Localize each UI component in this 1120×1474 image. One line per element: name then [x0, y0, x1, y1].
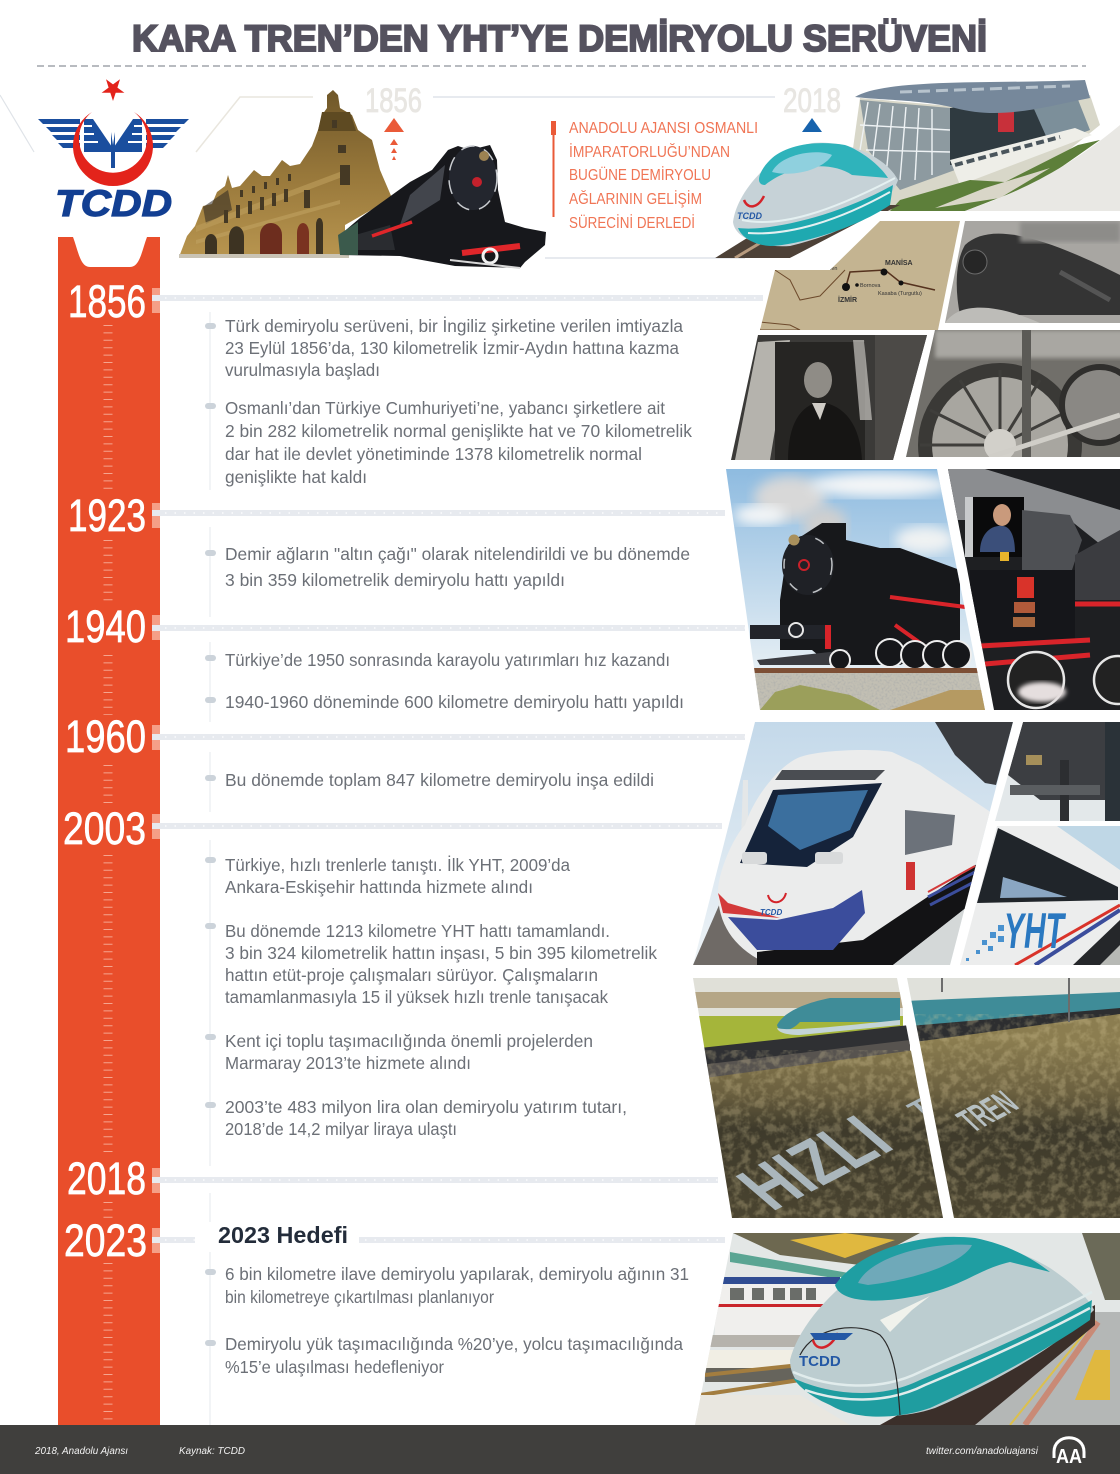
text block: 1923 [225, 544, 690, 590]
photo: İzmir map: MANİSA [885, 259, 913, 267]
footer source: Kaynak: TCDD [179, 1446, 245, 1457]
photo: YHT train front: TCDD [760, 908, 782, 917]
year labels: 2018 [67, 1153, 146, 1204]
photo: archive locomotive [945, 221, 1120, 323]
icon: AA logo: AA [1056, 1446, 1082, 1468]
intro text: İMPARATORLUĞU’NDAN [569, 142, 730, 161]
text block: 1856: Türk demiryolu serüveni, bir İngiliz şirketine verilen imtiyazla [225, 316, 683, 336]
year labels: 1923 [68, 490, 146, 541]
photo: steam locomotive [726, 469, 990, 711]
intro text [551, 120, 758, 232]
text block: 2003: tamamlanmasıyla 15 il yüksek hızlı trenle tanışacak [225, 987, 608, 1007]
icon: crescent [73, 112, 153, 186]
text block: 2003: 3 bin 324 kilometrelik hattın inşası, 5 bin 395 kilometrelik [225, 943, 657, 963]
text block: 2003: Türkiye, hızlı trenlerle tanıştı. İlk YHT, 2009’da [225, 855, 570, 875]
text block: 1923: Demir ağların "altın çağı" olarak nitelendirildi ve bu dönemde [225, 544, 690, 564]
text block: 1856: 23 Eylül 1856’da, 130 kilometrelik İzmir-Aydın hattına kazma [225, 338, 679, 358]
photo: YHT carriage: YHT [1004, 903, 1067, 959]
intro text: SÜRECİNİ DERLEDİ [569, 213, 695, 232]
photo: steam locomotive hero [338, 145, 546, 268]
hero year 2018: 2018 [783, 82, 841, 120]
photo: modern station and high-speed train hero: TCDD [737, 211, 762, 221]
footer credit: 2018, Anadolu Ajansı [34, 1446, 128, 1457]
photo: high-speed train, TREN sign [905, 978, 1120, 1218]
year tabs [152, 288, 160, 1253]
year labels: 1960 [65, 711, 146, 762]
heading: 2023 Hedefi: 2023 Hedefi [218, 1222, 348, 1248]
bullets [205, 323, 216, 1346]
text block: 1856 [225, 316, 692, 487]
footer bar [0, 1425, 1120, 1474]
photo: Siemens YHT at station [690, 1233, 1120, 1428]
photo: Siemens YHT at station: TCDD [799, 1353, 841, 1370]
icon: AA logo [1054, 1438, 1084, 1468]
photo: high-speed train, HIZLI sign: T [901, 1094, 941, 1125]
text block: 1856: genişlikte hat kaldı [225, 467, 367, 487]
logo wordmark: TCDD [55, 183, 172, 224]
photo: Atatürk at train window [730, 335, 930, 460]
text block: 1940: 1940-1960 döneminde 600 kilometre demiryolu hattı yapıldı [225, 692, 684, 712]
vertical guide lines [209, 312, 211, 1425]
year labels: 1856 [68, 276, 146, 327]
photo: archive wheel close-up [906, 330, 1120, 457]
photo: İzmir map: Kasaba (Turgutlu) [878, 291, 922, 297]
intro text: ANADOLU AJANSI OSMANLI [569, 120, 758, 137]
icon: wings [38, 119, 189, 168]
text block: 1960: Bu dönemde toplam 847 kilometre demiryolu inşa edildi [225, 770, 654, 790]
text block: 2003: 2018’de 14,2 milyar liraya ulaştı [225, 1119, 457, 1139]
photo: Haydarpaşa station building [179, 90, 392, 258]
photo: high-speed train, HIZLI sign: HIZLI [720, 1103, 910, 1223]
photo: İzmir map: İZMİR [838, 296, 857, 304]
photo: modern station and high-speed train hero [715, 80, 1100, 258]
photo: İzmir map [755, 218, 965, 333]
photo: station canopy [990, 722, 1120, 822]
text block: 1856: Osmanlı’dan Türkiye Cumhuriyeti’ne, yabancı şirketlere ait [225, 398, 665, 418]
photo: İzmir map: Bornova [860, 283, 881, 289]
hero arrow 2018 [802, 118, 822, 132]
icon: star [102, 79, 124, 101]
text block: 1940 [225, 650, 684, 712]
photo: high-speed train, HIZLI sign [693, 978, 945, 1223]
photo: YHT carriage [960, 826, 1120, 966]
title: KARA TREN’DEN YHT’YE DEMİRYOLU SERÜVENİ [132, 17, 987, 59]
text block: 1856: vurulmasıyla başladı [225, 360, 380, 380]
photo: locomotive cab with driver [945, 469, 1120, 710]
text block: 1856: dar hat ile devlet yönetiminde 1378 kilometrelik normal [225, 444, 642, 464]
year labels: 2023 [64, 1215, 147, 1266]
text block: 2003: Ankara-Eskişehir hattında hizmete alındı [225, 877, 533, 897]
text block: 2003: hattın etüt-proje çalışmaları sürüyor. Çalışmaların [225, 965, 598, 985]
text block: 2003: Kent içi toplu taşımacılığında önemli projelerden [225, 1031, 593, 1051]
text block: 1923: 3 bin 359 kilometrelik demiryolu hattı yapıldı [225, 570, 565, 590]
text block: 2003 [225, 855, 657, 1139]
text block: 2003: Marmaray 2013’te hizmete alındı [225, 1053, 471, 1073]
hero arrows 1856 [384, 118, 404, 160]
hero year 1856: 1856 [365, 82, 422, 120]
text block: 1856: 2 bin 282 kilometrelik normal genişlikte hat ve 70 kilometrelik [225, 421, 692, 441]
text block: 2023: Demiryolu yük taşımacılığında %20’ye, yolcu taşımacılığında [225, 1334, 683, 1354]
photo: YHT train front [690, 722, 1015, 967]
text block: 2003: Bu dönemde 1213 kilometre YHT hattı tamamlandı. [225, 921, 610, 941]
year labels: 2003 [63, 803, 146, 854]
photo: İzmir map: Menemen [813, 266, 837, 272]
year labels [63, 276, 147, 1266]
text block: 1940: Türkiye’de 1950 sonrasında karayolu yatırımları hız kazandı [225, 650, 670, 670]
logo: TCDD [38, 79, 189, 224]
text block: 2023: %15’e ulaşılması hedefleniyor [225, 1357, 444, 1377]
icon: wing gaps [80, 125, 146, 143]
intro accent line [551, 121, 556, 217]
text block: 2023: bin kilometreye çıkartılması planlanıyor [225, 1287, 494, 1307]
dotted year rules [152, 298, 763, 1240]
intro text: AĞLARININ GELİŞİM [569, 189, 702, 208]
text block: 2003: 2003’te 483 milyon lira olan demiryolu yatırım tutarı, [225, 1097, 627, 1117]
photo: high-speed train, TREN sign: TREN [949, 1085, 1027, 1139]
year labels: 1940 [65, 601, 146, 652]
footer social: twitter.com/anadoluajansi [926, 1446, 1039, 1457]
text block: 2023 [225, 1264, 689, 1377]
intro text: BUGÜNE DEMİRYOLU [569, 165, 711, 184]
grey corner shape [965, 125, 1120, 211]
timeline ticks [104, 325, 112, 1420]
text block: 2023: 6 bin kilometre ilave demiryolu yapılarak, demiryolu ağının 31 [225, 1264, 689, 1284]
vermilion timeline bar [58, 237, 160, 1425]
